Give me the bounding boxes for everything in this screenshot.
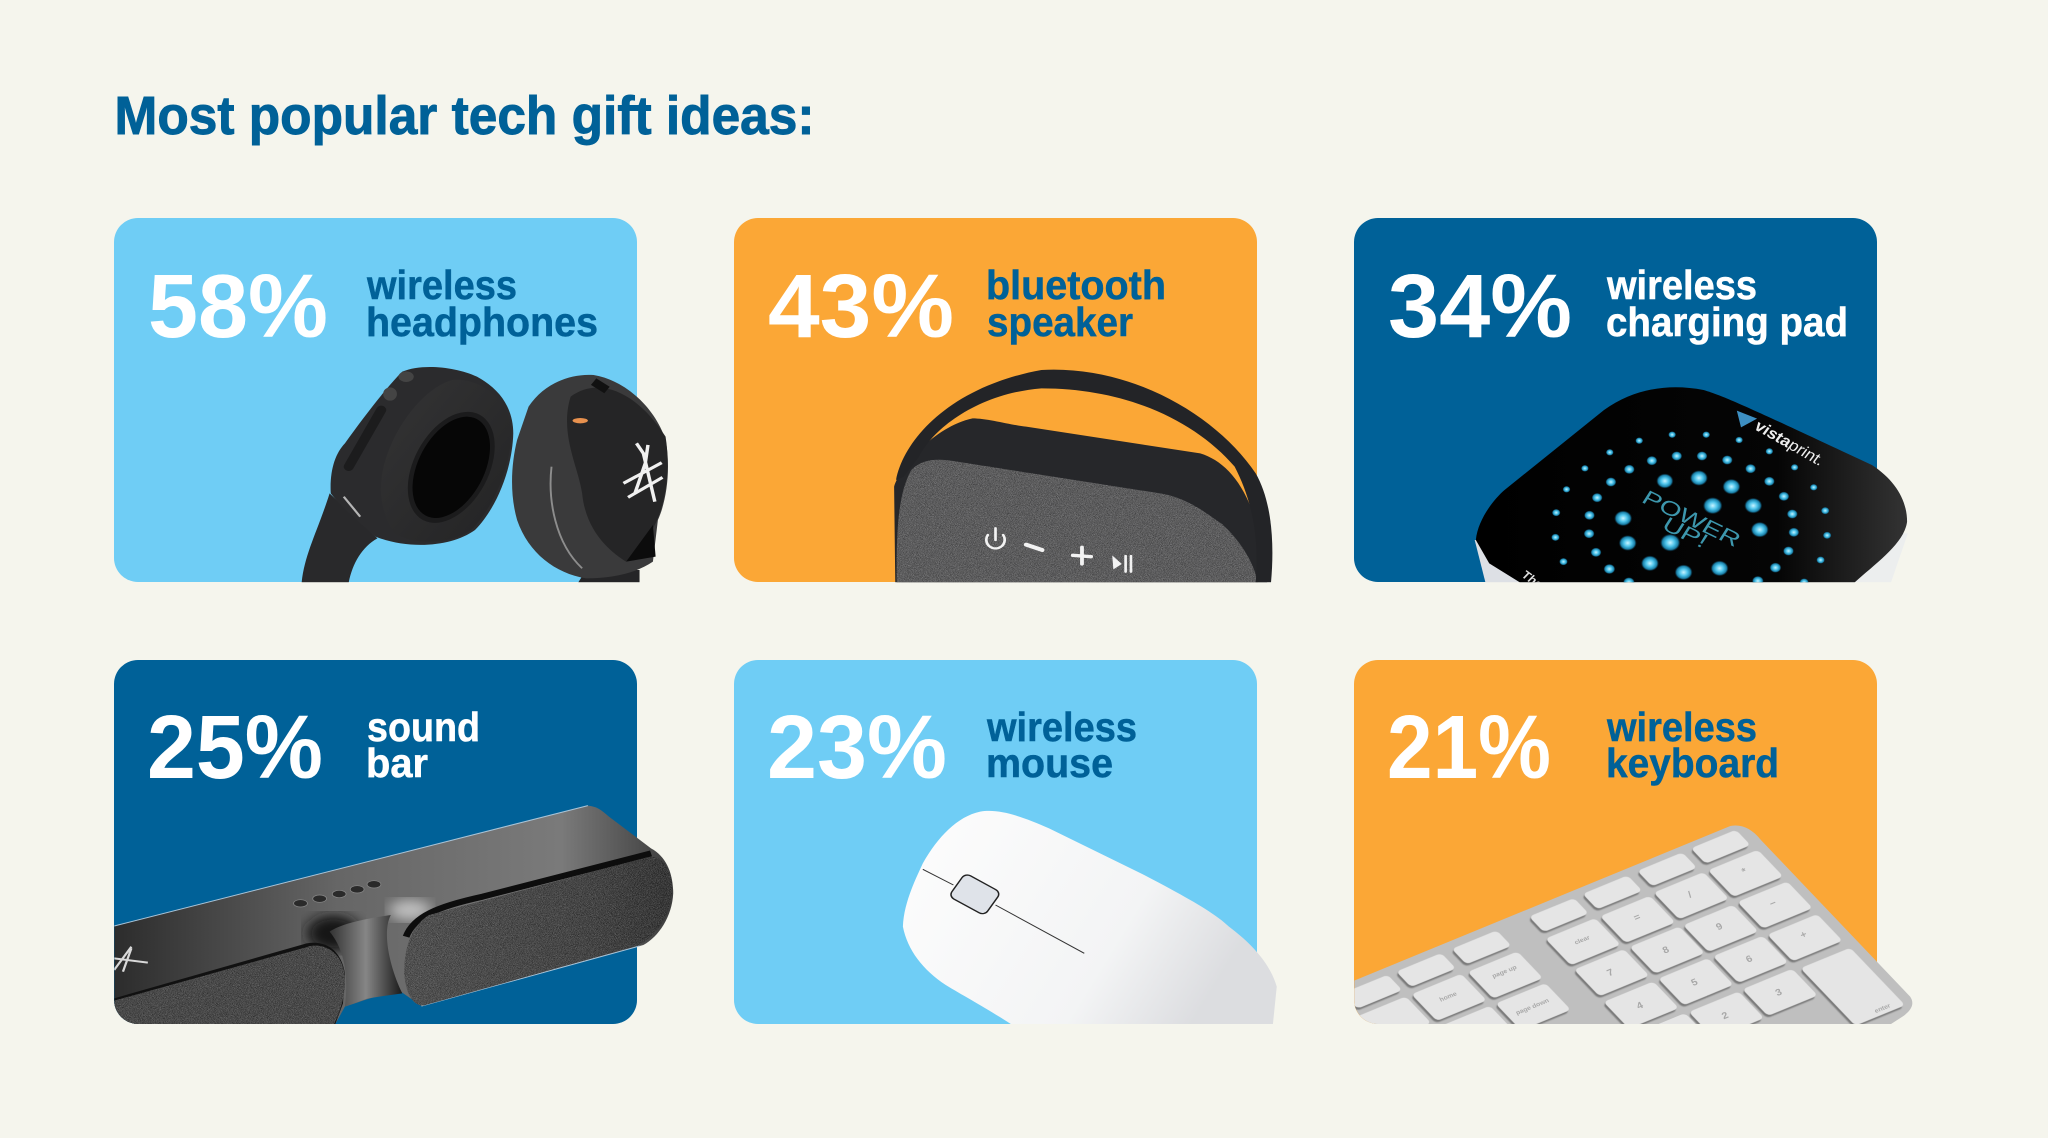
pad print: POWER UP!: UP! <box>1658 513 1712 553</box>
label: bluetooth speaker <box>986 262 1166 345</box>
key legends: * <box>1740 866 1749 877</box>
key legends: / <box>1686 890 1694 900</box>
title: Most popular tech gift ideas: <box>114 86 814 146</box>
label: sound bar: bar <box>366 740 428 786</box>
key legends: 8 <box>1661 945 1672 956</box>
key legends: 7 <box>1605 967 1616 979</box>
label: wireless headphones <box>366 262 598 345</box>
stat: 43%: 43% <box>768 257 954 357</box>
label: wireless mouse: mouse <box>986 740 1113 786</box>
stat: 25%: 25% <box>147 698 323 798</box>
product: sound bar <box>114 806 673 1024</box>
key legends: page down <box>1515 997 1550 1017</box>
panel: wireless headphones 58% <box>114 218 668 582</box>
key legends: − <box>1768 898 1779 910</box>
stat: 34%: 34% <box>1388 257 1572 357</box>
key legends: 3 <box>1774 987 1784 999</box>
label: wireless mouse: wireless <box>986 704 1137 750</box>
product: speaker <box>894 370 1272 582</box>
product: headphones <box>302 367 668 582</box>
label: wireless keyboard <box>1606 704 1779 786</box>
label: bluetooth speaker: speaker <box>987 299 1133 345</box>
panel: sound bar 25% <box>114 660 673 1024</box>
key legends: clear <box>1573 934 1592 946</box>
label: bluetooth speaker: bluetooth <box>986 262 1166 308</box>
product: charging pad: The <box>1519 568 1546 591</box>
key legends: page up <box>1491 964 1518 980</box>
panel: bluetooth speaker 43% <box>734 218 1272 582</box>
key legends: = <box>1632 912 1643 924</box>
key legends: enter <box>1873 1003 1892 1015</box>
pad print: vistaprint logo <box>1736 410 1820 466</box>
stat: 21%: 21% <box>1387 698 1551 798</box>
product: charging pad <box>1475 387 1908 591</box>
label: wireless mouse <box>986 704 1137 786</box>
stat: 58%: 58% <box>148 257 328 357</box>
label: wireless charging pad: wireless <box>1606 262 1757 308</box>
label: wireless headphones: headphones <box>366 299 598 345</box>
label: sound bar <box>366 704 480 786</box>
key legends: 9 <box>1714 921 1725 933</box>
key legends: home <box>1439 991 1459 1003</box>
key legends: 2 <box>1720 1010 1731 1022</box>
stat: 23%: 23% <box>767 698 947 798</box>
label: wireless keyboard: keyboard <box>1606 740 1779 786</box>
product: mouse <box>903 811 1277 1024</box>
key legends <box>1439 866 1892 1022</box>
pad print: POWER UP!: POWER <box>1638 487 1745 552</box>
key legends: 6 <box>1744 954 1755 965</box>
product: keyboard <box>1354 826 1912 1024</box>
panel: wireless mouse 23% <box>734 660 1277 1024</box>
label: wireless charging pad <box>1606 262 1848 345</box>
label: wireless headphones: wireless <box>366 262 517 308</box>
panel: wireless keyboard 21% <box>1354 660 1912 1024</box>
key legends: 4 <box>1635 1000 1646 1012</box>
pad print: vistaprint logo: vistaprint. <box>1751 418 1828 469</box>
label: sound bar: sound <box>367 704 480 750</box>
label: wireless charging pad: charging pad <box>1606 299 1848 345</box>
label: wireless keyboard: wireless <box>1606 704 1757 750</box>
key legends: + <box>1798 929 1809 941</box>
panel: wireless charging pad 34% <box>1354 218 1908 591</box>
key legends: 5 <box>1690 977 1700 989</box>
